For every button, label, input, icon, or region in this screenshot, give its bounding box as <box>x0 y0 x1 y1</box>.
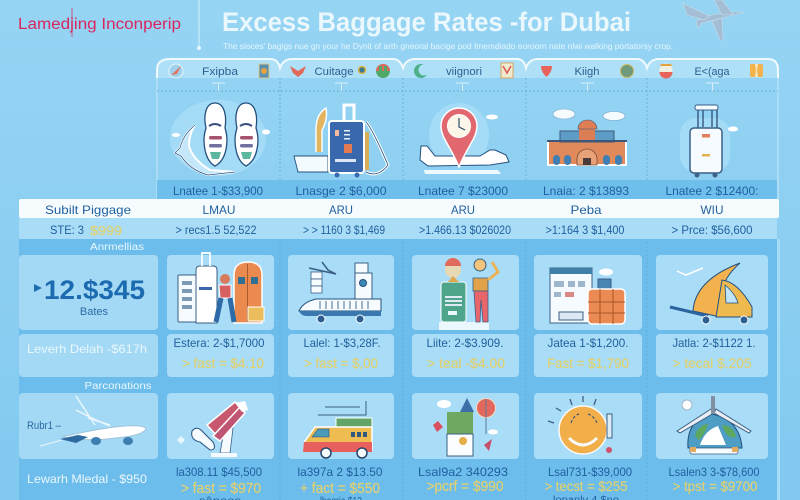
band: white header row: WIU <box>700 203 724 217</box>
panel: headline rate: Bates <box>80 306 109 318</box>
column 5 header <box>660 64 763 78</box>
card: row 1 column 5 <box>656 255 768 377</box>
icon: domed building <box>547 109 627 165</box>
card: row 2 column 5: > tpst = $9700 <box>672 478 758 494</box>
card: row 1 column 2: Lalel: 1-$3,28F. <box>304 336 380 350</box>
column 2 header: Cuitage <box>314 66 354 78</box>
panel: level note: Leverh Delah -$617h <box>27 342 147 356</box>
card: row 1 column 3: Liite: 2-$3.909. <box>426 336 504 350</box>
band: white header row: Peba <box>570 203 602 217</box>
card: row 2 column 2 <box>288 393 394 500</box>
column 2 header <box>290 64 390 78</box>
band: price row <box>19 218 777 239</box>
band: price row: >1:164 3 $1,400 <box>546 223 625 237</box>
column 3 header: viignori <box>446 66 482 78</box>
band: price row: > recs1.5 52,522 <box>176 223 257 237</box>
card: row 2 column 4: Lsal731-$39,000 <box>548 465 632 479</box>
card: row 2 column 5: Lsalen3 3-$78,600 <box>668 465 760 479</box>
title: Excess Baggage Rates -for Dubai <box>222 7 631 37</box>
column 1 header <box>169 64 269 78</box>
card: row 1 column 1: > fast = $4.10 <box>182 355 264 371</box>
band: white header row: LMAU <box>202 203 236 217</box>
band: lines row <box>157 180 777 199</box>
band: lines row: Lnaia: 2 $13893 <box>543 184 629 198</box>
band: white header row <box>19 199 779 218</box>
card: row 1 column 4: Jatea 1-$1,200. <box>548 336 628 350</box>
column 5 header: E<(aga <box>694 66 730 78</box>
band: lines row: Lnatee 1-$33,900 <box>173 184 263 198</box>
icon: map pin over plane <box>420 103 509 174</box>
card: row 2 column 3: >pcrf = $990 <box>426 478 504 495</box>
column 4 header <box>541 64 634 78</box>
section label: Anrmellias: Anrmellias <box>90 242 144 253</box>
card: row 2 column 4: > tecst = $255 <box>544 478 628 494</box>
panel: plane card: Rubr1 – <box>27 420 62 432</box>
column 3 header <box>414 63 513 78</box>
card: row 1 column 4: Fast = $1,790 <box>547 355 629 371</box>
band: price row: >1.466.13 $026020 <box>419 223 511 237</box>
card: row 2 column 5 <box>656 393 768 494</box>
band: price row: STE: 3 <box>50 223 84 237</box>
band: price row: $999 <box>90 223 122 238</box>
band: white header row: Subilt Piggage <box>45 203 131 217</box>
icon: blue suitcase <box>294 105 388 178</box>
column 1 header: Fxipba <box>202 66 239 78</box>
card: row 1 column 2 <box>288 255 394 377</box>
section label: Parconations: Parconations <box>84 381 152 392</box>
card: row 2 column 2: + fact = $550 <box>300 480 380 497</box>
column 4 header: Kiigh <box>574 66 600 78</box>
card: row 2 column 1: > fast = $970 <box>181 480 261 497</box>
band: white header row: ARU <box>451 203 475 217</box>
band: price row: > Prce: $56,600 <box>672 223 753 237</box>
card: row 1 column 2: > fast = $,00 <box>304 355 378 371</box>
band: price row: > > 1160 3 $1,469 <box>303 223 385 237</box>
card: row 2 column 1 <box>167 393 274 500</box>
band: lines row: Lnatee 2 $12400: <box>666 184 758 198</box>
band: lines row: Lnasge 2 $6,000 <box>296 184 387 198</box>
card: row 1 column 1: Estera: 2-$1,7000 <box>174 336 265 350</box>
band: lines row: Lnatee 7 $23000 <box>418 184 508 198</box>
panel: headline rate <box>19 255 158 330</box>
panel: level note <box>19 334 158 377</box>
card: row 2 column 4 <box>534 393 642 500</box>
panel: plane card <box>19 393 158 459</box>
card: row 1 column 1 <box>167 253 274 377</box>
logo text: Lamedjing Inconperip <box>18 16 181 33</box>
card: row 2 column 3: Lsal9a2 340293 <box>418 465 508 479</box>
column guides <box>157 78 778 500</box>
card: row 1 column 3: > teal -$4.00 <box>427 355 505 371</box>
card: row 2 column 3 <box>412 393 519 495</box>
panel: column headers <box>157 59 778 200</box>
card: row 1 column 4 <box>534 255 642 377</box>
card: row 2 column 1: la308.11 $45,500 <box>176 465 262 479</box>
card: row 1 column 5: > tecal $.205 <box>672 355 752 371</box>
text: level medal note: Lewarh Mledal - $950 <box>27 472 147 486</box>
card: row 1 column 5: Jatla: 2-$1122 1. <box>672 336 756 350</box>
icon: white suitcase <box>680 105 738 178</box>
card: row 2 column 2: la397a 2 $13.50 <box>298 465 383 479</box>
band: white header row: ARU <box>329 203 353 217</box>
panel: headline rate: 12.$345 <box>44 275 145 305</box>
card: row 1 column 3 <box>412 255 519 377</box>
icon: airplane top right <box>683 0 745 40</box>
subtitle: The sioces' bagigs nue gn your he Dynit of arth gneoral bacige pod Imemdiado eoroorn nate nlwi walking portatorsy crop. <box>223 41 673 51</box>
icon: shoes <box>170 100 270 176</box>
